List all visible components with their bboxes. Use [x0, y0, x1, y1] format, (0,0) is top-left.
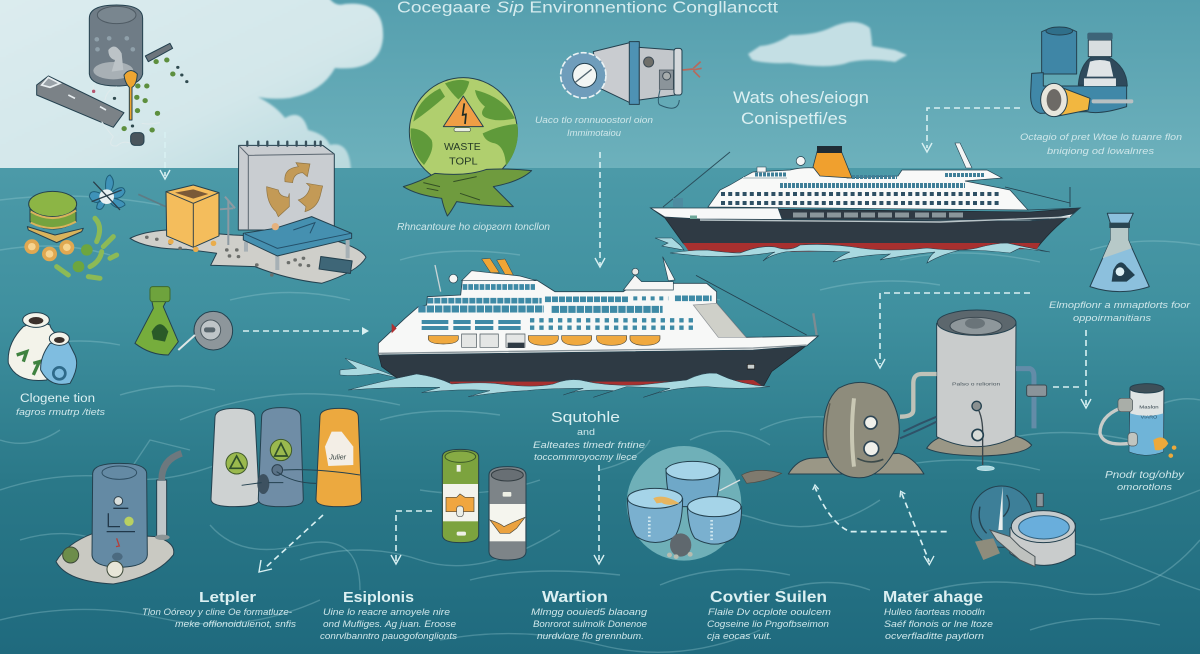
caption: Mater ahage: Hulleo faorteas moodln — [884, 607, 985, 618]
grey pump face — [788, 382, 924, 478]
arrow: equipment to rear ship — [922, 108, 1020, 152]
rear wake — [340, 358, 400, 378]
caption: Mater ahage — [883, 589, 993, 642]
caption: jar: omorotlons — [1117, 482, 1172, 493]
blue tank on island — [56, 453, 182, 584]
arrow: curved to pump — [813, 485, 947, 532]
caption: Letpler: meke offlonoiduienot, snfis — [175, 619, 296, 630]
blue bed — [220, 197, 352, 273]
caption: Wartion: Bonrorot sulmolk Donenoe — [533, 619, 647, 630]
gear machine — [561, 42, 702, 108]
green bottle and porthole — [135, 287, 233, 355]
wake — [670, 243, 1050, 263]
jar with hose: VIARO — [1141, 415, 1158, 420]
settling tanks bubble — [627, 446, 782, 561]
heading: ship specs: Conispetfi/es — [741, 109, 847, 128]
caption: equipment: Octagio of pret Wtoe lo tuanre flon — [1020, 132, 1182, 143]
heading: ship specs — [733, 88, 869, 128]
warning globe — [403, 78, 532, 216]
arrow: two-way — [900, 491, 934, 565]
caption: flask: Elmopflonr a mmaptlorts foor — [1049, 300, 1191, 311]
filtration cylinder — [900, 310, 1047, 471]
water tank machine — [37, 5, 187, 146]
caption: Clogenetion: fagros rmutrp /tiets — [16, 407, 105, 418]
caption: Wartion: Wartion — [542, 589, 608, 606]
caption: Clogenetion: Clogene tion — [20, 393, 95, 405]
caption: Wartion: nurdvlore flo grennbum. — [537, 631, 644, 642]
arrow: to pump — [875, 293, 1030, 368]
caption: machine: Immimotaiou — [567, 128, 622, 139]
caption: equipment: bniqiong od lowalnres — [1047, 146, 1154, 157]
caption: Esiplonis: Esiplonis — [343, 589, 414, 606]
caption: Esiplonis: conrvlbanntro pauogofonglionts — [320, 631, 457, 642]
sacks icon — [8, 313, 77, 384]
caption: Mater ahage: Saéf flonois or lne ltoze — [884, 619, 993, 630]
caption: Squtohle: and — [577, 427, 595, 438]
caption: Letpler: Tlon Oóreoy y cline Oe formatluze- — [142, 607, 292, 618]
arrow: machine to ship — [595, 152, 605, 267]
caption: Covtier Suilen: Cogseine lio Pngofbseimon — [707, 619, 829, 630]
caption: flask: oppoirmanitians — [1073, 313, 1151, 324]
small cloud right — [748, 22, 907, 66]
splash flower icon — [89, 175, 125, 210]
warning globe: TOPL — [449, 157, 478, 168]
caption: flask — [1049, 300, 1191, 324]
arrow: to jar — [1053, 330, 1091, 408]
caption: machine — [535, 115, 653, 139]
caption: machine: Uaco tlo ronnuoostorl oion — [535, 115, 653, 126]
caption: Squtohle — [533, 409, 645, 463]
arrow: canisters to Esiplonis — [391, 511, 432, 564]
jar with hose: Maslon — [1139, 405, 1159, 410]
caption: equipment — [1020, 132, 1182, 157]
caption: Squtohle: Ealteates tlmedr fntine — [533, 440, 645, 451]
bow waves — [348, 373, 770, 397]
warning globe: WASTE — [444, 142, 481, 153]
caption: Letpler: Letpler — [199, 589, 256, 606]
caption: jar — [1105, 469, 1185, 493]
funnels — [462, 271, 537, 281]
caption: Squtohle: toccommroyocmy llece — [534, 452, 637, 463]
canisters — [442, 449, 526, 560]
large cloud left — [0, 0, 383, 172]
caption: Esiplonis: Uine lo reacre arnoyele nire — [323, 607, 450, 618]
caption: Covtier Suilen: Covtier Suilen — [710, 589, 827, 606]
heading: ship specs: Wats ohes/eiogn — [733, 88, 869, 107]
arrow: bottle to ship — [243, 327, 369, 335]
green drum and parts — [27, 191, 117, 278]
three recycling tanks — [211, 408, 362, 507]
caption: Covtier Suilen — [707, 589, 831, 642]
sea background — [0, 168, 1200, 654]
arrow: tank to bin — [160, 132, 170, 179]
title: Cocegaare Sip Environnentionc Congllancctt — [397, 0, 779, 16]
lifeboats — [428, 336, 660, 345]
caption: Esiplonis: ond Mufliges. Ag juan. Eroose — [323, 619, 456, 630]
caption: Letpler — [142, 589, 296, 630]
caption: Wartion: Mlmgg oouied5 blaoang — [531, 607, 648, 618]
caption: Covtier Suilen: Flaile Dv ocplote ooulcem — [708, 607, 831, 618]
chemical flask — [1090, 213, 1149, 292]
caption: jar: Pnodr tog/ohby — [1105, 469, 1185, 481]
sky background — [0, 0, 1200, 169]
caption: Esiplonis — [320, 589, 457, 642]
recycling island — [130, 142, 366, 283]
filtration cylinder: Palso o reliorion — [952, 382, 1001, 388]
rear cruise ship — [651, 143, 1080, 263]
three recycling tanks: Julier — [328, 452, 346, 461]
caption: Mater ahage: Mater ahage — [883, 589, 983, 606]
blue equipment top right — [1031, 27, 1133, 117]
caption: globe: Rhncantoure ho cioргorn toncllon — [397, 222, 550, 233]
globe tub — [971, 486, 1075, 567]
window rows — [463, 278, 535, 295]
recycling notepad — [238, 142, 334, 230]
yellow waste bin — [138, 185, 219, 249]
funnel — [813, 148, 852, 178]
sea ripples — [0, 196, 1200, 652]
arrow: tanks to Letpler — [259, 515, 323, 572]
caption: Wartion — [531, 589, 648, 642]
caption: Mater ahage: ocverfladitte paytlorn — [885, 631, 984, 642]
caption: Clogenetion — [16, 393, 105, 418]
jar with hose — [1100, 384, 1174, 456]
front cruise ship — [340, 257, 818, 397]
caption: Covtier Suilen: cja eocas vuit. — [707, 631, 772, 642]
caption: Squtohle: Squtohle — [551, 409, 620, 426]
arrow: to Wartion — [594, 465, 604, 564]
